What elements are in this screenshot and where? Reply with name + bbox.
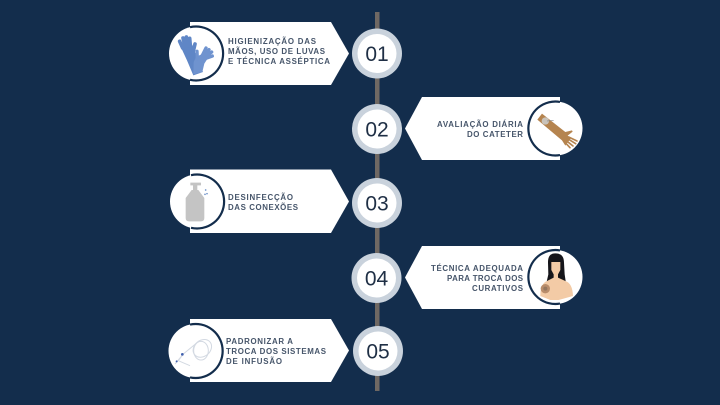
- step 01: [169, 22, 402, 85]
- text 05: PADRONIZAR A: [226, 337, 293, 346]
- text 02: AVALIAÇÃO DIÁRIA: [437, 120, 523, 129]
- icon: sanitizer bottle: [170, 174, 224, 228]
- text 05: TROCA DOS SISTEMAS: [226, 347, 326, 356]
- number 04: [352, 253, 402, 303]
- number 01: 01: [365, 43, 389, 66]
- number 04: 04: [365, 268, 388, 290]
- number 03: [352, 178, 402, 228]
- text 04: CURATIVOS: [472, 284, 523, 293]
- text 01: HIGIENIZAÇÃO DAS: [228, 37, 316, 46]
- text 02: DO CATETER: [467, 130, 523, 139]
- number 01: [352, 28, 402, 78]
- banner 01: [190, 22, 349, 85]
- banner 05: [190, 319, 349, 382]
- icon: infusion set: [168, 324, 223, 378]
- text 03: DESINFECÇÃO: [228, 193, 293, 202]
- number 02: 02: [365, 118, 389, 142]
- banner 04: [405, 246, 560, 309]
- text 02: [437, 120, 523, 139]
- text 04: [431, 264, 523, 293]
- number 05: [353, 326, 403, 376]
- number 02: [352, 104, 402, 154]
- text 03: DAS CONEXÕES: [228, 203, 298, 212]
- text 05: DE INFUSÃO: [226, 357, 282, 366]
- text 01: E TÉCNICA ASSÉPTICA: [228, 57, 330, 66]
- text 01: [228, 37, 330, 66]
- text 04: PARA TROCA DOS: [447, 274, 523, 283]
- text 04: TÉCNICA ADEQUADA: [431, 264, 523, 273]
- icon: arm with catheter: [528, 102, 582, 156]
- text 01: MÃOS, USO DE LUVAS: [228, 47, 325, 56]
- text 05: [226, 337, 326, 366]
- banner 02: [405, 97, 560, 160]
- icon: gloves: [169, 26, 223, 81]
- step 05: [168, 319, 403, 382]
- timeline line: [375, 12, 380, 391]
- icon: woman with dressing: [528, 250, 582, 304]
- banner 03: [190, 170, 349, 233]
- text 03: [228, 193, 298, 212]
- number 03: 03: [365, 192, 389, 216]
- step 02: [352, 97, 582, 160]
- step 03: [170, 170, 402, 233]
- step 04: [352, 246, 582, 309]
- number 05: 05: [366, 340, 390, 364]
